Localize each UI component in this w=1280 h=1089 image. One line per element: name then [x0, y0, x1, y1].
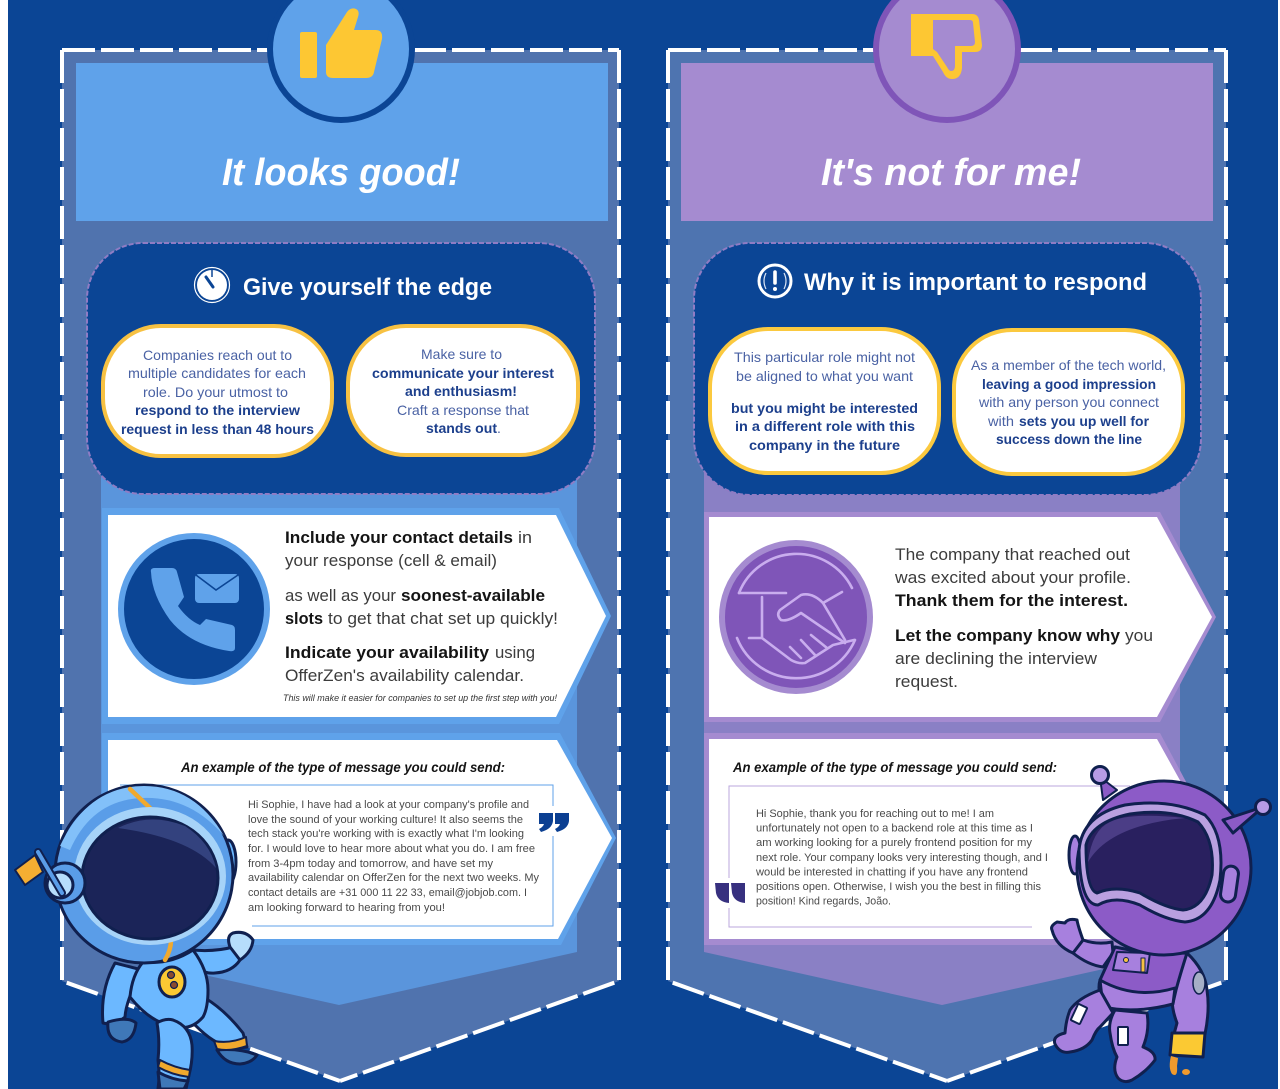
bubble: aligned role: in a different role with this [735, 418, 915, 434]
message text: positions open. Otherwise, I wish you the best in filling this [756, 881, 1042, 893]
card: contact details [102, 508, 611, 724]
card: thank the company [704, 512, 1216, 722]
bubble: good impression: success down the line [996, 431, 1142, 447]
message text: would be interested in chatting if you have any frontend [755, 866, 1028, 878]
header block [76, 63, 608, 221]
message text: for. I would love to hear more about what you do. I am free [248, 843, 535, 855]
bubble: good impression: with any person you connect [978, 394, 1159, 410]
text: contact details: slots [285, 609, 323, 628]
thumbs up badge [270, 0, 412, 120]
panel: it looks good [62, 0, 619, 1081]
text: thank the company: Thank them for the interest. [895, 591, 1128, 610]
bubble: communicate interest: and enthusiasm! [405, 383, 517, 399]
panel: give yourself the edge [87, 243, 595, 494]
message text: contact details are +31 000 11 22 33, email@jobjob.com. I [248, 887, 527, 899]
card: example message [704, 733, 1216, 945]
text: thank the company: The company that reached out [895, 545, 1130, 564]
message text: unfortunately not open to a backend role at this time as I [756, 822, 1033, 834]
bubble: communicate interest: stands out [426, 420, 497, 436]
icon: handshake [722, 543, 870, 691]
message text: Hi Sophie, I have had a look at your company's profile and [248, 799, 529, 811]
header block [681, 63, 1213, 221]
bubble: communicate interest: Make sure to [421, 346, 502, 362]
text: thank the company: was excited about your profile. [894, 568, 1131, 587]
message text: next role. Your company looks very interesting though, and I [756, 852, 1048, 864]
message text: availability calendar on OfferZen for the next two weeks. My [248, 872, 539, 884]
message text [755, 808, 1048, 908]
message text: am working looking for a purely frontend position for my [756, 837, 1033, 849]
text: contact details: Include your contact details [285, 528, 513, 547]
message text: position! Kind regards, João. [756, 896, 891, 908]
heading: example: An example of the type of message you could send: [180, 759, 505, 775]
bubble: aligned role: be aligned to what you want [736, 368, 913, 384]
card: example message [102, 733, 616, 945]
text: contact details: This will make it easier for companies to set up the first step with you! [283, 693, 557, 704]
bubble: reach out: request in less than 48 hours [121, 421, 314, 437]
message text: tech stack you're working with is exactly what I'm looking [248, 828, 524, 840]
bubble: reach out: role. Do your utmost to [143, 384, 288, 400]
bubble: reach out: respond to the interview [135, 402, 300, 418]
text: contact details: using [495, 643, 535, 662]
message text: am looking forward to hearing from you! [248, 902, 445, 914]
thumbs down badge [876, 0, 1018, 120]
lower band [704, 470, 1180, 1005]
bubble: aligned role: but you might be interested [731, 400, 918, 416]
quote marks [713, 878, 748, 908]
text: contact details: to get that chat set up quickly! [328, 609, 558, 628]
bubble: aligned role: company in the future [749, 437, 900, 453]
bubble: good impression: As a member of the tech world, [971, 357, 1166, 373]
bubble: good impression: sets you up well for [1019, 413, 1150, 429]
text: thank the company: are declining the interview [895, 649, 1098, 668]
text: contact details: your response (cell & email) [285, 551, 497, 570]
banner background [62, 50, 619, 1081]
panel: why it is important to respond [694, 243, 1201, 495]
lower band [101, 470, 577, 1005]
message text: love the sound of your working culture! It also seems the [248, 814, 523, 826]
bubble: reach out: multiple candidates for each [128, 365, 306, 381]
bubble: communicate interest [348, 326, 578, 455]
quote marks [536, 806, 572, 836]
heading: give yourself the edge: Give yourself the edge [243, 274, 492, 301]
message frame [120, 785, 553, 926]
text: contact details: OfferZen's availability calendar. [285, 666, 524, 685]
bubble: good impression: with [987, 413, 1014, 429]
icon: phone and envelope [121, 536, 267, 682]
bubble: communicate interest: communicate your interest [372, 365, 554, 381]
message frame [729, 786, 1130, 927]
bubble: good impression: leaving a good impression [982, 376, 1156, 392]
text: contact details: soonest-available [401, 586, 545, 605]
message text [248, 799, 539, 914]
icon: stopwatch [194, 268, 230, 302]
text: contact details: in [518, 528, 532, 547]
illustration: blue astronaut [15, 785, 257, 1089]
text: thank the company: Let the company know why [895, 626, 1121, 645]
bubble: aligned role [710, 329, 939, 473]
bubble: reach out: Companies reach out to [143, 347, 292, 363]
text: thank the company [894, 545, 1153, 691]
heading: it looks good: It looks good! [222, 152, 460, 194]
text: contact details: as well as your [285, 586, 396, 605]
icon: exclamation [759, 265, 791, 297]
panel: it's not for me [668, 0, 1226, 1081]
bubble: communicate interest: . [497, 420, 501, 436]
bubble: communicate interest: Craft a response that [397, 402, 529, 418]
illustration: purple astronaut [1052, 766, 1270, 1082]
text: thank the company: request. [895, 672, 958, 691]
heading: it's not for me: It's not for me! [821, 152, 1081, 194]
text: contact details [283, 528, 558, 704]
bubble: good impression [954, 330, 1183, 474]
text: thank the company: you [1125, 626, 1153, 645]
heading: why it is important: Why it is important to respond [804, 269, 1147, 296]
message text: Hi Sophie, thank you for reaching out to me! I am [756, 808, 994, 820]
bubble: reach out [103, 326, 332, 456]
heading: example: An example of the type of message you could send: [732, 759, 1057, 775]
bubble: aligned role: This particular role might not [734, 349, 915, 365]
banner background [668, 50, 1226, 1081]
text: contact details: Indicate your availability [285, 643, 490, 662]
message text: from 3-4pm today and tomorrow, and have set my [248, 858, 493, 870]
